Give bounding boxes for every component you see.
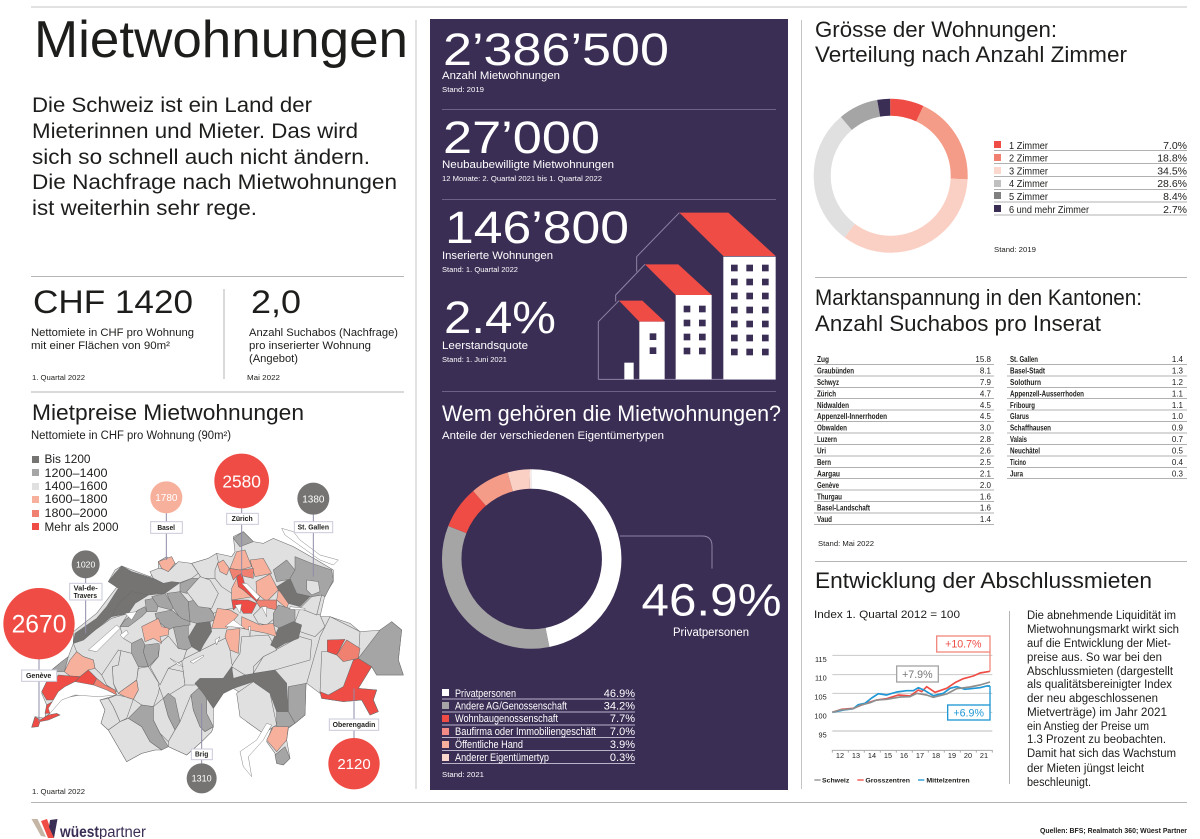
line chart: closing rent index: 19 bbox=[948, 751, 956, 760]
callout: plus 7.9 percent bbox=[897, 666, 938, 682]
table: cantons right column: 1.1 bbox=[1172, 401, 1184, 410]
heading: flat sizes bbox=[815, 17, 1127, 67]
source note: Quellen: BFS; Realmatch 360; Wüest Partner bbox=[1040, 826, 1187, 835]
heading: ownership: Wem gehören die Mietwohnungen? bbox=[442, 401, 781, 426]
table: cantons left column: 1.6 bbox=[980, 492, 992, 501]
legend: ownership: Öffentliche Hand bbox=[455, 739, 523, 751]
text block: rent commentary: preise aus. So war bei den bbox=[1027, 652, 1162, 664]
line chart: closing rent index: 18 bbox=[932, 751, 940, 760]
intro text block: Die Schweiz ist ein Land der bbox=[32, 94, 312, 117]
KPI: total rental flats: 2’386’500 bbox=[443, 24, 669, 75]
line chart: closing rent index: 17 bbox=[916, 751, 924, 760]
table: cantons right column: 0.3 bbox=[1172, 469, 1184, 478]
legend: ownership: 7.0% bbox=[610, 726, 635, 738]
table: cantons left column: Zug bbox=[817, 355, 829, 364]
text block: rent commentary: auf die Entwicklung der Miet- bbox=[1027, 638, 1171, 650]
table: cantons left column: 8.1 bbox=[980, 366, 992, 375]
heading: market tension: Anzahl Suchabos pro Inserat bbox=[815, 311, 1101, 336]
callout: plus 10.7 percent bbox=[937, 636, 990, 671]
legend: ownership: Andere AG/Genossenschaft bbox=[455, 700, 567, 712]
country outline bbox=[32, 532, 403, 765]
legend: flat sizes: 5 Zimmer bbox=[1009, 191, 1048, 203]
legend: ownership: 34.2% bbox=[604, 700, 635, 712]
heading: flat sizes: Verteilung nach Anzahl Zimmer bbox=[815, 42, 1127, 67]
KPI: seekers per listing: Anzahl Suchabos (Nachfrage) bbox=[249, 327, 398, 339]
legend: ownership: Baufirma oder Immobiliengeschäft bbox=[455, 726, 596, 738]
map legend: 1400–1600 bbox=[44, 481, 108, 493]
legend: ownership: 0.3% bbox=[610, 752, 635, 764]
line chart: closing rent index: 115 bbox=[815, 655, 827, 664]
legend: ownership: Anderer Eigentümertyp bbox=[455, 752, 549, 764]
callout: Genève 2670: 2670 bbox=[12, 611, 66, 638]
line chart: closing rent index: 15 bbox=[884, 751, 892, 760]
heading: ownership bbox=[442, 401, 781, 442]
text block: rent commentary: Mietwohnungsmarkt wirkt sich bbox=[1027, 624, 1179, 636]
table: cantons right column: St. Gallen bbox=[1010, 355, 1038, 364]
flat sizes date note: Stand: 2019 bbox=[994, 245, 1036, 254]
chart legend: Grosszentren bbox=[865, 777, 910, 784]
KPI: seekers per listing: Mai 2022 bbox=[247, 373, 280, 382]
table: cantons right column: Solothurn bbox=[1010, 378, 1041, 387]
table: cantons right column: Glarus bbox=[1010, 412, 1029, 421]
KPI: seekers per listing: 2,0 bbox=[251, 284, 301, 320]
legend: ownership bbox=[442, 688, 635, 764]
line chart: closing rent index: 13 bbox=[852, 751, 860, 760]
table: cantons right column: Jura bbox=[1010, 469, 1023, 478]
table: cantons right column: Appenzell-Ausserrhoden bbox=[1010, 389, 1084, 398]
table: cantons left column: 3.0 bbox=[980, 424, 992, 433]
intro text block: Mieterinnen und Mieter. Das wird bbox=[32, 120, 358, 143]
heading: rent prices bbox=[31, 400, 304, 442]
KPI: approved new flats bbox=[442, 112, 614, 183]
callout: plus 6.9 percent: +6.9% bbox=[953, 707, 984, 719]
legend: flat sizes: 4 Zimmer bbox=[1009, 178, 1048, 190]
legend: flat sizes: 7.0% bbox=[1163, 140, 1187, 152]
table: cantons left column: Schwyz bbox=[817, 378, 839, 387]
line chart: closing rent index: 20 bbox=[964, 751, 972, 760]
ownership date note: Stand: 2021 bbox=[442, 770, 484, 779]
KPI: vacancy rate: Leerstandsquote bbox=[442, 340, 528, 352]
callout: Genève 2670: Genève bbox=[26, 673, 51, 680]
heading: market tension: Marktanspannung in den Kantonen: bbox=[815, 285, 1142, 310]
table: cantons right column: 0.5 bbox=[1172, 446, 1184, 456]
table: cantons left column: Luzern bbox=[817, 435, 837, 444]
line chart: closing rent index: 12 bbox=[836, 751, 844, 760]
intro text block: sich so schnell auch nicht ändern. bbox=[32, 146, 370, 169]
line chart: closing rent index: 100 bbox=[814, 711, 827, 720]
callout: plus 6.9 percent bbox=[948, 686, 990, 720]
chart legend bbox=[814, 777, 970, 784]
KPI: total rental flats bbox=[442, 24, 669, 94]
callout: Oberengadin 2120: Oberengadin bbox=[333, 722, 375, 729]
table: cantons right column: Schaffhausen bbox=[1010, 424, 1051, 433]
table: cantons right column: Neuchâtel bbox=[1010, 446, 1040, 456]
text block: rent commentary: Die abnehmende Liquidität im bbox=[1027, 610, 1176, 622]
icon: three houses bbox=[598, 213, 776, 379]
callout: plus 7.9 percent: +7.9% bbox=[902, 669, 933, 681]
table: cantons left column bbox=[814, 355, 994, 524]
KPI: net rent: CHF 1420 bbox=[33, 284, 193, 320]
text block: rent commentary: Abschlussmieten (dargestellt bbox=[1027, 666, 1174, 678]
table: cantons left column: 2.1 bbox=[980, 469, 992, 478]
callout: 46.9 percent private owners bbox=[620, 536, 782, 639]
text block: rent commentary: Damit hat sich das Wachstum bbox=[1027, 748, 1176, 760]
chart subtitle: Index 1. Quartal 2012 = 100 bbox=[814, 609, 960, 621]
table: cantons left column: Nidwalden bbox=[817, 401, 849, 410]
map legend: 1600–1800 bbox=[44, 494, 108, 506]
market tension date note: Stand: Mai 2022 bbox=[818, 539, 874, 548]
table: cantons right column: Valais bbox=[1010, 435, 1027, 444]
map legend bbox=[32, 454, 118, 534]
legend: flat sizes: 3 Zimmer bbox=[1009, 166, 1048, 178]
text block: rent commentary: Mietverträge) im Jahr 2021 bbox=[1027, 707, 1167, 719]
heading: rent prices: Mietpreise Mietwohnungen bbox=[32, 400, 304, 425]
line chart: closing rent index bbox=[814, 636, 992, 784]
KPI: listed flats: Inserierte Wohnungen bbox=[442, 250, 553, 262]
callout: Val-de-Travers 1020: Travers bbox=[74, 593, 97, 600]
logo: wüestpartner bbox=[32, 819, 146, 839]
table: cantons left column: Vaud bbox=[817, 515, 832, 524]
callout: St. Gallen 1380: 1380 bbox=[302, 494, 325, 505]
heading: flat sizes: Grösse der Wohnungen: bbox=[815, 17, 1057, 42]
map date note: 1. Quartal 2022 bbox=[32, 787, 85, 796]
KPI: seekers per listing: pro inserierter Wohnung bbox=[249, 340, 371, 352]
table: cantons right column: 0.9 bbox=[1172, 424, 1184, 433]
callout: 46.9 percent private owners: 46.9% bbox=[642, 574, 782, 626]
table: cantons right column bbox=[1007, 355, 1187, 478]
table: cantons left column: Zürich bbox=[817, 389, 836, 398]
line chart: closing rent index: 95 bbox=[819, 730, 827, 739]
donut chart: flat sizes bbox=[822, 107, 959, 244]
table: cantons right column: 0.4 bbox=[1172, 458, 1184, 467]
table: cantons left column: 4.5 bbox=[980, 401, 992, 410]
legend: flat sizes: 18.8% bbox=[1157, 152, 1187, 164]
KPI: vacancy rate bbox=[442, 292, 556, 364]
callout: Brig 1310: Brig bbox=[195, 752, 208, 759]
line chart: closing rent index: 105 bbox=[814, 693, 827, 702]
table: cantons right column: Ticino bbox=[1010, 458, 1026, 467]
table: cantons left column: Uri bbox=[817, 446, 826, 456]
callout: Basel 1780 bbox=[150, 481, 182, 560]
legend: ownership: 3.9% bbox=[610, 739, 635, 751]
legend: ownership: 46.9% bbox=[604, 688, 635, 700]
line chart: closing rent index: 110 bbox=[815, 674, 827, 683]
table: cantons left column: Basel-Landschaft bbox=[817, 504, 870, 513]
line chart: closing rent index: 21 bbox=[980, 751, 988, 760]
intro text block bbox=[32, 94, 397, 220]
callout: St. Gallen 1380: St. Gallen bbox=[298, 525, 329, 532]
callout: plus 10.7 percent: +10.7% bbox=[945, 639, 982, 651]
callout: 46.9 percent private owners: Privatpersonen bbox=[673, 627, 749, 639]
KPI: total rental flats: Stand: 2019 bbox=[442, 85, 484, 94]
callout: Oberengadin 2120 bbox=[328, 688, 380, 789]
table: cantons left column: 2.5 bbox=[980, 458, 992, 467]
table: cantons left column: Thurgau bbox=[817, 492, 842, 501]
table: cantons right column: 1.3 bbox=[1172, 366, 1184, 375]
legend: ownership: Privatpersonen bbox=[455, 688, 516, 700]
table: cantons left column: Graubünden bbox=[817, 366, 854, 375]
legend: flat sizes: 6 und mehr Zimmer bbox=[1009, 204, 1089, 216]
KPI: listed flats bbox=[442, 202, 629, 274]
intro text block: Die Nachfrage nach Mietwohnungen bbox=[32, 171, 397, 194]
text block: rent commentary: 1.3 Prozent zu beobachten. bbox=[1027, 734, 1166, 746]
text block: rent commentary: als qualitätsbereinigter Index bbox=[1027, 679, 1172, 691]
callout: Val-de-Travers 1020: 1020 bbox=[76, 560, 95, 570]
table: cantons right column: Basel-Stadt bbox=[1010, 366, 1045, 375]
panel: purple key figures bbox=[430, 19, 788, 790]
table: cantons left column: Obwalden bbox=[817, 424, 847, 433]
heading: closing rents: Entwicklung der Abschlussmieten bbox=[815, 568, 1152, 593]
map legend: 1800–2000 bbox=[44, 508, 108, 520]
legend: ownership: Wohnbaugenossenschaft bbox=[455, 713, 558, 725]
text block: rent commentary: der Mieten jüngst leicht bbox=[1027, 763, 1145, 775]
table: cantons left column: 1.6 bbox=[980, 504, 992, 513]
legend: flat sizes: 2 Zimmer bbox=[1009, 152, 1048, 164]
table: cantons left column: 4.7 bbox=[980, 389, 992, 398]
callout: Zürich 2580 bbox=[214, 454, 269, 577]
callout: Val-de-Travers 1020: Val-de- bbox=[74, 585, 98, 592]
map legend: 1200–1400 bbox=[44, 468, 108, 480]
legend: flat sizes: 1 Zimmer bbox=[1009, 140, 1048, 152]
KPI: seekers per listing: (Angebot) bbox=[249, 353, 298, 365]
map legend: Mehr als 2000 bbox=[44, 522, 118, 534]
callout: Brig 1310: 1310 bbox=[192, 774, 212, 784]
heading: market tension bbox=[815, 285, 1142, 336]
KPI: total rental flats: Anzahl Mietwohnungen bbox=[442, 70, 560, 82]
callout: Genève 2670 bbox=[3, 588, 75, 722]
callout: Basel 1780: Basel bbox=[157, 525, 175, 532]
callout: Val-de-Travers 1020 bbox=[70, 550, 102, 633]
chart legend: Schweiz bbox=[822, 777, 849, 784]
KPI: vacancy rate: 2.4% bbox=[444, 292, 556, 343]
table: cantons left column: 4.5 bbox=[980, 412, 992, 421]
KPI: approved new flats: 12 Monate: 2. Quartal 2021 bis 1. Quartal 2022 bbox=[442, 174, 602, 183]
table: cantons left column: Genève bbox=[817, 481, 839, 490]
KPI: listed flats: Stand: 1. Quartal 2022 bbox=[442, 265, 518, 274]
callout: Zürich 2580: 2580 bbox=[222, 471, 261, 491]
callout: St. Gallen 1380 bbox=[294, 483, 333, 577]
KPI: listed flats: 146’800 bbox=[445, 202, 629, 253]
table: cantons left column: Bern bbox=[817, 458, 831, 467]
KPI: approved new flats: Neubaubewilligte Mietwohnungen bbox=[442, 159, 614, 171]
legend: flat sizes: 2.7% bbox=[1163, 204, 1187, 216]
KPI: net rent: Nettomiete in CHF pro Wohnung bbox=[31, 327, 194, 339]
line chart: closing rent index: 14 bbox=[868, 751, 876, 760]
line chart: closing rent index: 16 bbox=[900, 751, 908, 760]
text block: rent commentary bbox=[1027, 610, 1179, 789]
callout: Oberengadin 2120: 2120 bbox=[337, 756, 371, 773]
table: cantons left column: 2.6 bbox=[980, 446, 992, 456]
table: cantons left column: Appenzell-Innerrhoden bbox=[817, 412, 887, 421]
legend: flat sizes: 8.4% bbox=[1163, 191, 1187, 203]
KPI: net rent: 1. Quartal 2022 bbox=[32, 373, 85, 382]
KPI: seekers per listing bbox=[247, 284, 398, 382]
text block: rent commentary: beschleunigt. bbox=[1027, 777, 1091, 789]
table: cantons right column: 1.2 bbox=[1172, 378, 1184, 387]
table: cantons right column: 0.7 bbox=[1172, 435, 1184, 444]
table: cantons left column: 2.8 bbox=[980, 435, 992, 444]
title: Mietwohnungen bbox=[34, 11, 408, 69]
table: cantons right column: 1.4 bbox=[1172, 355, 1184, 364]
map: Switzerland rents by region bbox=[3, 454, 403, 793]
chart legend: Mittelzentren bbox=[926, 777, 970, 784]
legend: flat sizes: 34.5% bbox=[1157, 166, 1187, 178]
legend: ownership: 7.7% bbox=[610, 713, 635, 725]
KPI: vacancy rate: Stand: 1. Juni 2021 bbox=[442, 355, 507, 364]
KPI: net rent: mit einer Flächen von 90m² bbox=[31, 340, 170, 352]
donut chart: ownership bbox=[452, 479, 612, 639]
table: cantons right column: Fribourg bbox=[1010, 401, 1035, 410]
callout: Brig 1310 bbox=[187, 703, 217, 793]
intro text block: ist weiterhin sehr rege. bbox=[32, 197, 257, 220]
heading: rent prices: Nettomiete in CHF pro Wohnung (90m²) bbox=[31, 430, 231, 442]
table: cantons left column: 1.4 bbox=[980, 515, 992, 524]
map legend: Bis 1200 bbox=[44, 454, 90, 466]
legend: flat sizes: 28.6% bbox=[1157, 178, 1187, 190]
table: cantons left column: Aargau bbox=[817, 469, 840, 478]
callout: Basel 1780: 1780 bbox=[155, 493, 178, 504]
table: cantons right column: 1.1 bbox=[1172, 389, 1184, 398]
table: cantons left column: 7.9 bbox=[980, 378, 992, 387]
KPI: net rent bbox=[31, 284, 194, 382]
table: cantons left column: 15.8 bbox=[975, 355, 992, 364]
table: cantons right column: 1.0 bbox=[1172, 412, 1184, 421]
text block: rent commentary: ein Anstieg der Preise um bbox=[1027, 721, 1149, 733]
lakes bbox=[48, 682, 117, 713]
callout: Zürich 2580: Zürich bbox=[232, 516, 253, 523]
table: cantons left column: 2.0 bbox=[980, 481, 992, 490]
legend: flat sizes bbox=[994, 140, 1187, 216]
KPI: approved new flats: 27’000 bbox=[443, 112, 600, 163]
text block: rent commentary: der neu abgeschlossenen bbox=[1027, 693, 1158, 705]
heading: ownership: Anteile der verschiedenen Eigentümertypen bbox=[442, 430, 664, 442]
